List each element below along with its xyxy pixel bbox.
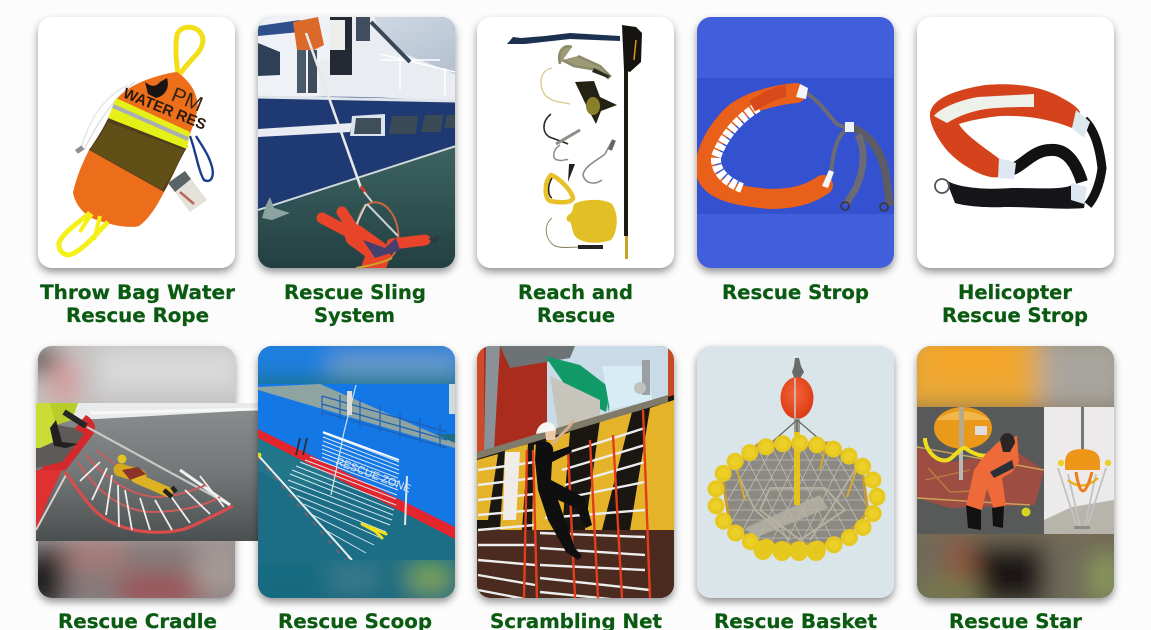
label: Reach and Rescue: Reach and [518, 281, 633, 304]
casualty in yellow suit [118, 454, 176, 497]
hull stripes [477, 395, 674, 530]
icon: rescue basket [715, 358, 877, 561]
label: Rescue Sling System: Rescue Sling [284, 281, 426, 304]
icon: throw bag: PM [168, 83, 206, 116]
yellow handle [546, 175, 573, 202]
hook [792, 358, 804, 380]
photo: scoop net on ship hull [257, 384, 455, 560]
label: Rescue Sling System: System [314, 304, 395, 327]
label: Throw Bag Water Rescue Rope: Rescue Rope [66, 304, 209, 327]
panel: Rescue Strop [697, 17, 894, 268]
panel: Scrambling Net [477, 346, 674, 600]
panel: Helicopter Rescue Strop [917, 17, 1114, 268]
pole [622, 25, 642, 259]
casualty [322, 212, 440, 272]
net rungs [478, 428, 650, 600]
floats [715, 443, 877, 551]
label: Reach and Rescue [518, 281, 633, 327]
photo: casualty on rescue star [917, 407, 1114, 534]
label: Rescue Strop: Rescue Strop [722, 281, 869, 304]
photo: climber on scrambling net [477, 346, 674, 600]
sheath [507, 33, 620, 44]
photo: ship and casualty in sling [258, 17, 456, 272]
icon: throw bag: WATER RES [121, 85, 209, 134]
photo: casualty on cradle net [36, 403, 258, 541]
rescuer hi-vis [36, 403, 86, 448]
icon: reach pole and attachments [507, 25, 642, 259]
panel: Rescue Basket [697, 346, 894, 598]
yellow float [567, 200, 617, 243]
scoop net [257, 432, 412, 560]
net side ropes [524, 410, 650, 598]
sling ring [357, 201, 400, 260]
panel: Throw Bag Water Rescue Rope [38, 17, 235, 268]
label: Throw Bag Water Rescue Rope: Throw Bag Water [40, 281, 235, 304]
panel: Rescue Scoop [252, 344, 460, 608]
person on deck [293, 17, 324, 93]
panel: Reach and Rescue [477, 17, 674, 268]
icon: rescue strop [706, 84, 890, 211]
panel: Rescue Star [912, 344, 1120, 608]
deck rail [477, 395, 668, 459]
railing [322, 395, 447, 448]
panel: Rescue Sling System [258, 17, 456, 272]
label: Helicopter Rescue Strop: Rescue Strop [942, 304, 1088, 327]
figure in water [362, 524, 386, 538]
net [722, 443, 868, 545]
label: Reach and Rescue: Rescue [537, 304, 615, 327]
label: Helicopter Rescue Strop: Helicopter [958, 281, 1072, 304]
casualty [966, 433, 1019, 530]
panel: Rescue Cradle [32, 344, 258, 608]
label: Throw Bag Water Rescue Rope [40, 281, 235, 327]
label: Helicopter Rescue Strop [942, 281, 1088, 327]
label: Rescue Sling System [284, 281, 426, 327]
icon: throw bag [59, 27, 213, 255]
icon: helicopter strop [930, 84, 1102, 209]
buoy [780, 377, 814, 419]
scoop net: RESCUE ZONE [334, 456, 412, 495]
climber [535, 420, 592, 560]
cradle net [65, 450, 233, 532]
